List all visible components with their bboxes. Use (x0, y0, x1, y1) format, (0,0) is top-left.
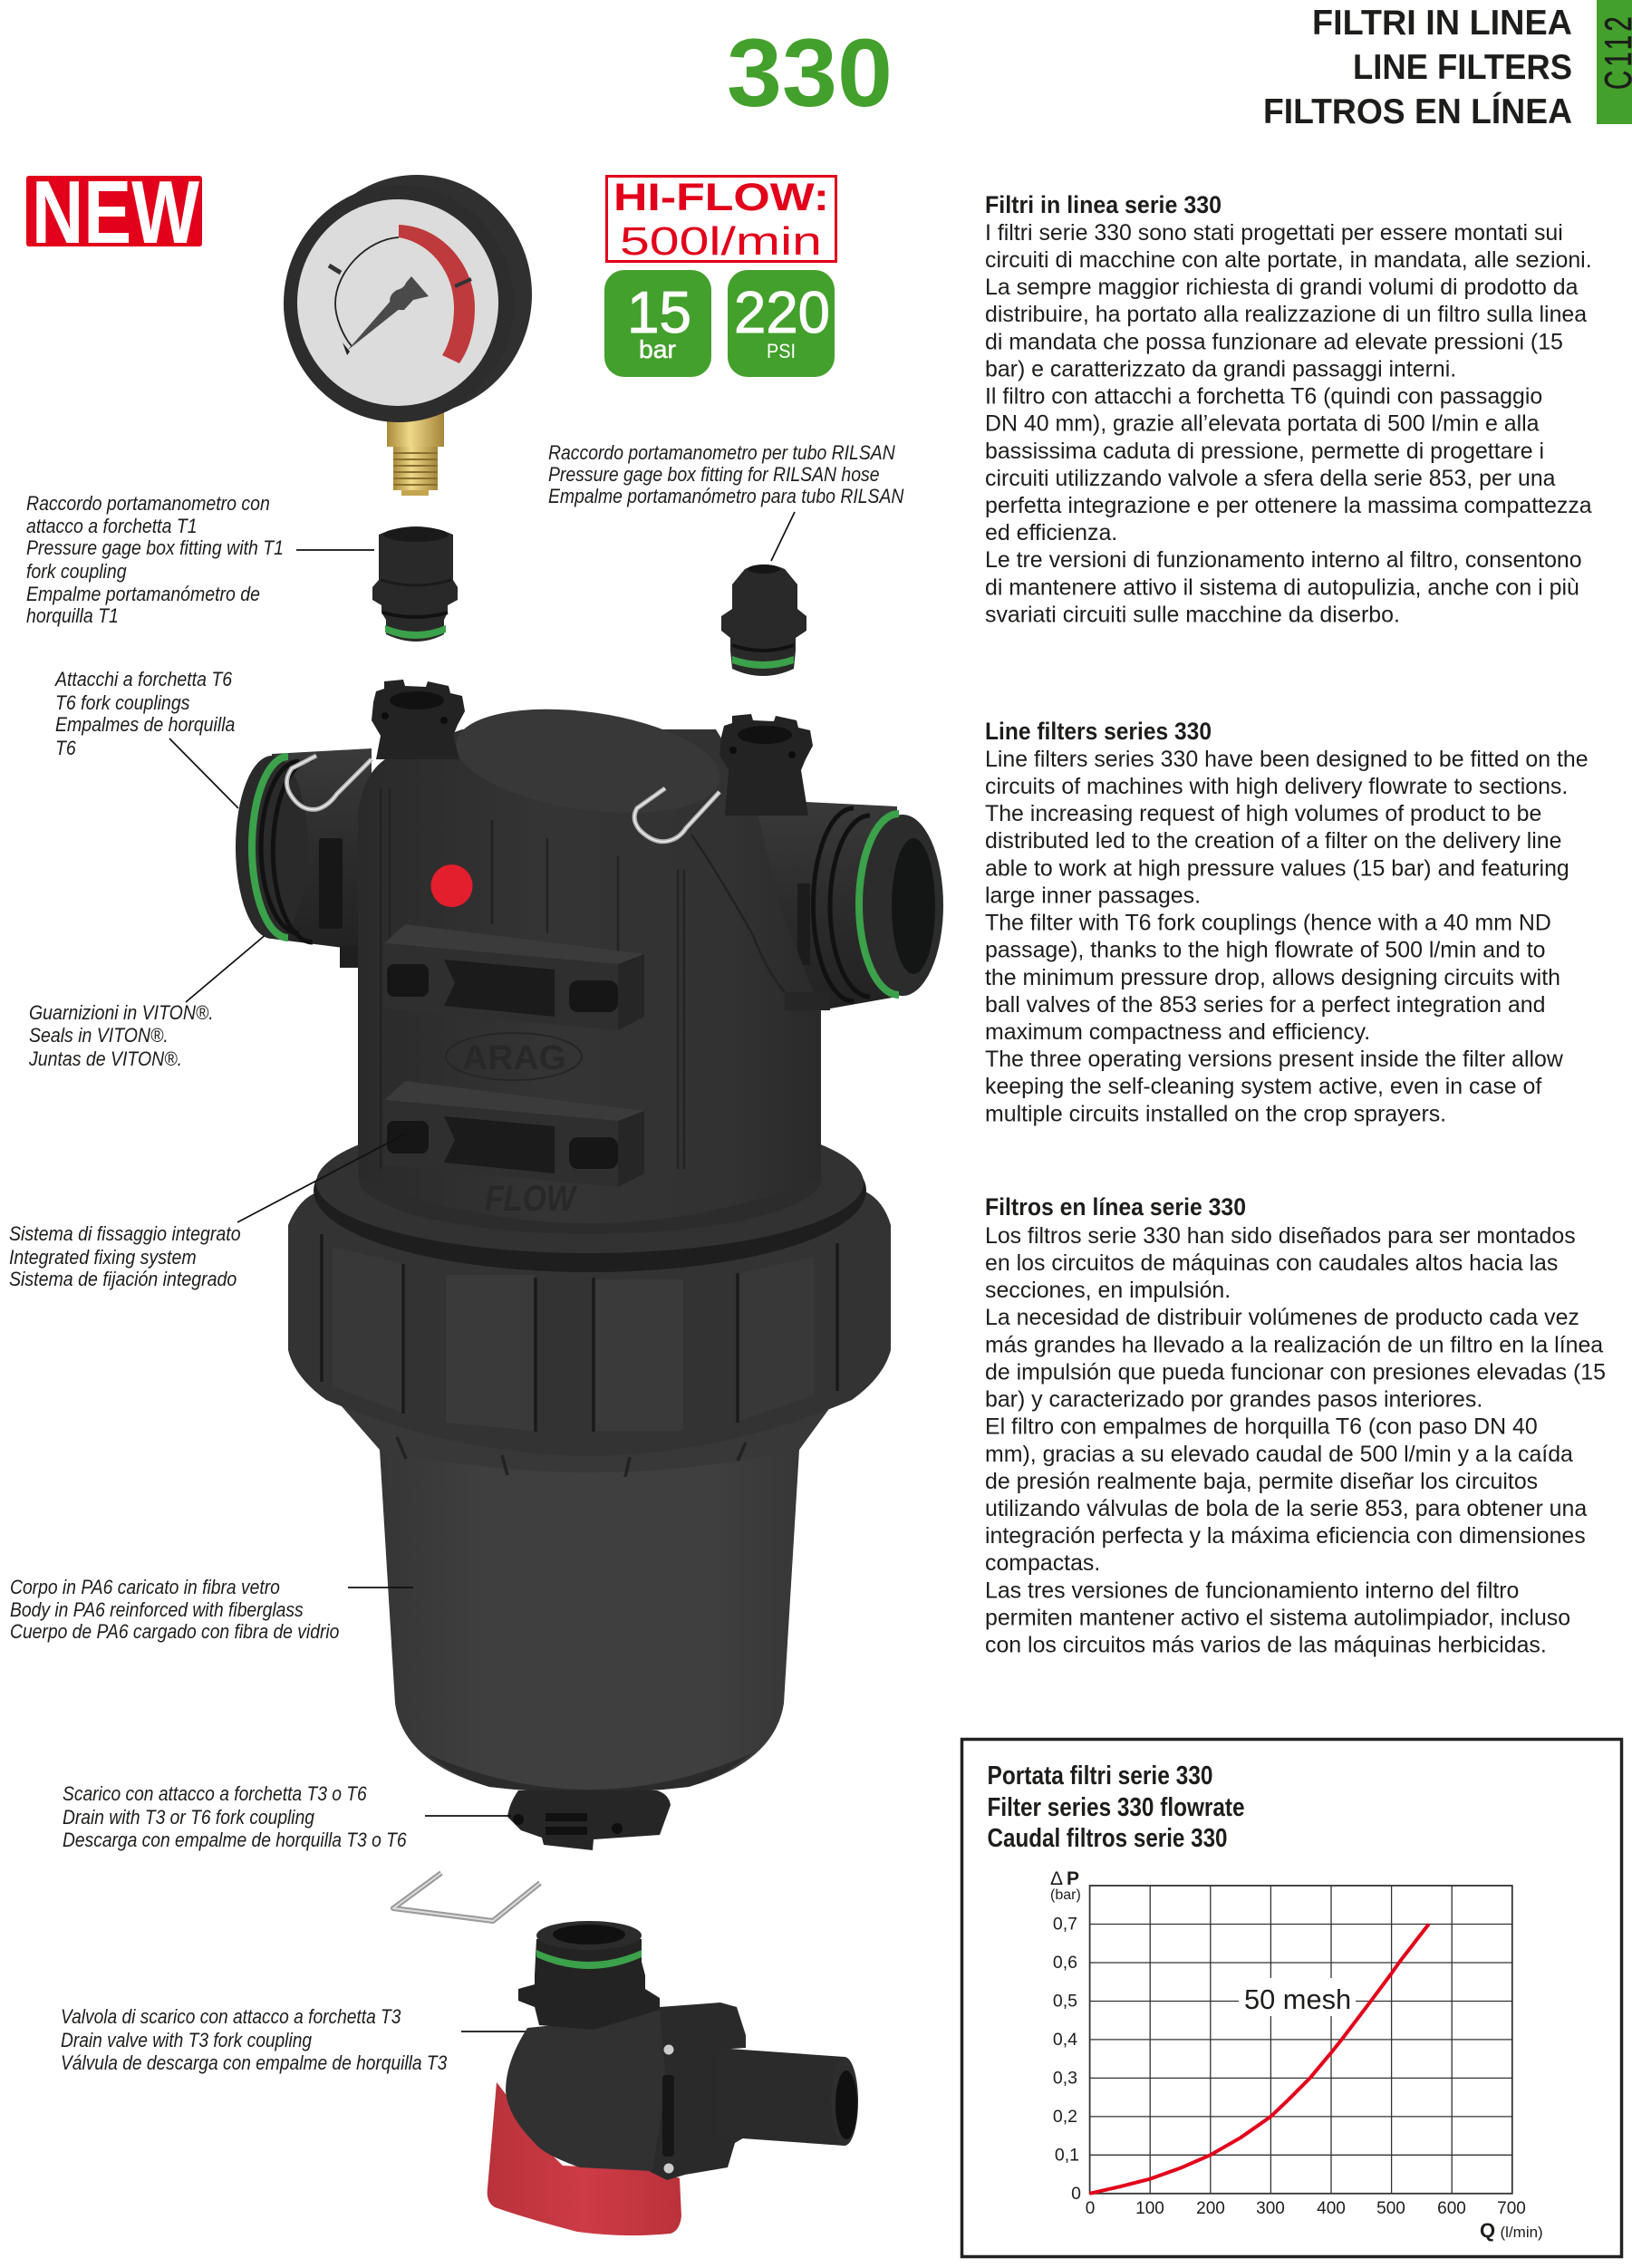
caption: RILSAN gauge fitting: Empalme portamanómetro para tubo RILSAN (548, 486, 903, 507)
text block: español: mm), gracias a su elevado caudal de 500 l/min y a la caída (985, 1442, 1573, 1467)
text block: español: El filtro con empalmes de horquilla T6 (con paso DN 40 (985, 1414, 1538, 1439)
text block: english: large inner passages. (985, 883, 1201, 908)
text block: italiano: distribuire, ha portato alla realizzazione di un filtro sulla linea (985, 302, 1587, 327)
page tab: C112 (1597, 0, 1632, 124)
x axis labels: 300 (1256, 2199, 1285, 2218)
text block: italiano: Il filtro con attacchi a forchetta T6 (quindi con passaggio (985, 384, 1542, 410)
text block: español: en los circuitos de máquinas con caudales altos hacia las (985, 1250, 1558, 1276)
text block: english: passage), thanks to the high flowrate of 500 l/min and to (985, 937, 1546, 962)
caption: RILSAN gauge fitting: Pressure gage box fitting for RILSAN hose (548, 464, 880, 486)
text block: italiano: perfetta integrazione e per ottenere la massima compattezza (985, 493, 1592, 518)
leader line: body (348, 1587, 413, 1588)
leader line: seals (186, 933, 267, 1002)
text block: italiano: di mandata che possa funzionare ad elevate pressioni (15 (985, 330, 1563, 355)
heading: product category: FILTROS EN LÍNEA (1263, 92, 1572, 131)
badge: hi-flow 500 l/min: HI-FLOW: (613, 176, 829, 219)
text block: english (985, 718, 1589, 1127)
text block: italiano: circuiti utilizzando valvole a sfera della serie 853, per una (985, 466, 1556, 491)
badge: 15 bar: bar (639, 335, 676, 363)
caption: drain: Drain with T3 or T6 fork coupling (63, 1807, 314, 1829)
caption: drain: Descarga con empalme de horquilla T3 o T6 (63, 1829, 407, 1851)
caption: RILSAN gauge fitting (548, 442, 903, 507)
text block: english: distributed led to the creation of a filter on the delivery line (985, 828, 1561, 854)
caption: RILSAN gauge fitting: Raccordo portamanometro per tubo RILSAN (548, 442, 895, 464)
x axis labels: 600 (1437, 2199, 1466, 2218)
caption: T6 fork couplings: T6 (55, 738, 76, 759)
y axis labels: 0,7 (1053, 1914, 1077, 1934)
y axis labels: 0,1 (1055, 2146, 1079, 2166)
y axis labels: 0,2 (1053, 2107, 1077, 2127)
curve label: 50 mesh: 50 mesh (1244, 1983, 1351, 2015)
text block: español: permiten mantener activo el sistema autolimpiador, incluso (985, 1606, 1570, 1631)
caption: VITON seals: Seals in VITON®. (29, 1025, 169, 1047)
text block: italiano: DN 40 mm), grazie all’elevata portata di 500 l/min e alla (985, 411, 1540, 437)
caption: integrated fixing system: Sistema de fijación integrado (9, 1269, 237, 1290)
badge: hi-flow 500 l/min: 500l/min (620, 219, 822, 264)
caption: drain valve: Drain valve with T3 fork coupling (61, 2030, 313, 2051)
left clip (286, 756, 372, 809)
text block: english: maximum compactness and efficiency. (985, 1019, 1370, 1045)
y axis labels: P (1067, 1868, 1079, 1889)
chart title: Caudal filtros serie 330 (988, 1824, 1227, 1853)
y axis labels: 0,4 (1053, 2030, 1077, 2050)
text block: español: utilizando válvulas de bola de la serie 853, para obtener una (985, 1496, 1587, 1521)
y axis labels: 0,3 (1053, 2068, 1077, 2088)
text block: italiano: circuiti di macchine con alte portate, in mandata, alle sezioni. (985, 247, 1592, 273)
badge: hi-flow 500 l/min (607, 176, 835, 264)
caption: VITON seals: Guarnizioni in VITON®. (29, 1002, 214, 1024)
y axis labels: Δ (1050, 1868, 1063, 1889)
x axis labels: 200 (1196, 2199, 1225, 2218)
y axis labels: 0,6 (1053, 1953, 1077, 1973)
text block: español: con los circuitos más varios de las máquinas herbicidas. (985, 1633, 1547, 1658)
text block: español: Filtros en línea serie 330 (985, 1193, 1246, 1221)
text block: español: bar) y caracterizado por grandes pasos interiores. (985, 1386, 1482, 1412)
side nut (649, 2003, 746, 2180)
y axis labels: 0,5 (1053, 1992, 1077, 2012)
top opening (536, 1921, 642, 1950)
text block: español: de impulsión que pueda funcionar con presiones elevadas (15 (985, 1359, 1606, 1385)
leader line: T6 couplings (169, 738, 238, 808)
icon: pressure gauge (284, 175, 532, 496)
logo: ARAG (462, 1039, 566, 1077)
text block: english: The three operating versions present inside the filter allow (985, 1047, 1564, 1072)
badge: NEW: NEW (32, 162, 199, 262)
text block: español: integración perfecta y la máxima eficiencia con dimensiones (985, 1523, 1586, 1549)
heading: product category: LINE FILTERS (1353, 48, 1572, 87)
chart title: Filter series 330 flowrate (988, 1793, 1245, 1822)
caption: T1 gauge fitting: fork coupling (26, 561, 127, 583)
bolt bar (662, 2044, 674, 2173)
red handle (488, 2082, 681, 2235)
x axis labels: 500 (1376, 2199, 1405, 2218)
red button (431, 864, 473, 907)
x axis labels (1086, 2199, 1543, 2242)
caption: VITON seals (28, 1002, 214, 1070)
x axis labels: 700 (1497, 2199, 1526, 2218)
caption: integrated fixing system: Sistema di fissaggio integrato (9, 1223, 241, 1245)
red flow curve (1090, 1925, 1429, 2194)
leader line: RILSAN fitting (771, 512, 795, 561)
text block: italiano: I filtri serie 330 sono stati progettati per essere montati sui (985, 220, 1563, 246)
text block: italiano: bassissima caduta di pressione, permette di progettare i (985, 439, 1544, 464)
text block: italiano: Le tre versioni di funzionamento interno al filtro, consentono (985, 547, 1582, 573)
text block: español: de presión realmente baja, permite diseñar los circuitos (985, 1469, 1538, 1494)
caption: T1 gauge fitting: horquilla T1 (26, 605, 119, 627)
caption: drain valve: Valvola di scarico con attacco a forchetta T3 (61, 2006, 401, 2028)
valve body (506, 2007, 666, 2171)
badge: 220 PSI: PSI (767, 340, 796, 362)
text block: english: Line filters series 330 (985, 718, 1212, 745)
y axis labels (1050, 1868, 1081, 2204)
text block: english: able to work at high pressure values (15 bar) and featuring (985, 855, 1569, 881)
caption: T6 fork couplings: Attacchi a forchetta T6 (53, 669, 233, 690)
badge: 15 bar (604, 270, 711, 377)
text block: español: secciones, en impulsión. (985, 1278, 1231, 1303)
left fork coupling (372, 680, 465, 759)
text block: español (985, 1193, 1606, 1658)
heading: product category (1263, 4, 1572, 131)
text block: italiano: La sempre maggior richiesta di grandi volumi di prodotto da (985, 275, 1579, 300)
wings and neck (518, 1939, 660, 2030)
ring nut (288, 1192, 891, 1456)
part: drain valve (488, 1921, 858, 2235)
text block: english: ball valves of the 853 series for a perfect integration and (985, 992, 1546, 1018)
upper bracket (384, 924, 644, 1030)
caption: T1 gauge fitting: attacco a forchetta T1 (26, 516, 198, 537)
part: RILSAN gauge fitting (721, 565, 806, 676)
x axis labels: 0 (1086, 2199, 1095, 2218)
heading: product category: FILTRI IN LINEA (1312, 4, 1572, 43)
text block: italiano: ed efficienza. (985, 520, 1117, 545)
text block: english: The increasing request of high volumes of product to be (985, 801, 1541, 826)
x axis labels: 100 (1135, 2199, 1164, 2218)
caption: VITON seals: Juntas de VITON®. (28, 1048, 182, 1070)
part: T1 gauge fitting (372, 526, 458, 642)
panel: flowrate chart (962, 1740, 1622, 2256)
caption: body material (10, 1577, 339, 1643)
caption: drain valve: Válvula de descarga con empalme de horquilla T3 (61, 2052, 448, 2074)
caption: T1 gauge fitting: Pressure gage box fitting with T1 (26, 537, 284, 559)
caption: T1 gauge fitting (26, 493, 284, 627)
badge: 220 PSI: 220 (734, 279, 830, 345)
y axis labels: 0 (1071, 2184, 1081, 2204)
product: line filter 330 (236, 680, 943, 1850)
text block: english: keeping the self-cleaning system active, even in case of (985, 1074, 1541, 1099)
caption: drain (63, 1783, 407, 1851)
hose barb (717, 2048, 845, 2146)
text block: italiano: svariati circuiti sulle macchine da diserbo. (985, 602, 1400, 627)
leader line: drain (425, 1815, 511, 1817)
y axis labels: (bar) (1050, 1887, 1081, 1903)
bowl (380, 1450, 799, 1792)
caption: body material: Corpo in PA6 caricato in fibra vetro (10, 1577, 280, 1598)
text block: italiano: di mantenere attivo il sistema di autopulizia, anche con i più (985, 574, 1579, 600)
main housing (358, 729, 821, 1223)
text block: italiano: bar) e caratterizzato da grandi passaggi interni. (985, 357, 1456, 382)
caption: T1 gauge fitting: Raccordo portamanometro con (26, 493, 270, 515)
right port (716, 797, 943, 1010)
housing ribs (381, 788, 785, 1169)
text block: español: La necesidad de distribuir volúmenes de producto cada vez (985, 1305, 1579, 1330)
lower bracket (384, 1081, 644, 1187)
x axis labels: Q (1480, 2219, 1495, 2242)
text block: español: compactas. (985, 1550, 1100, 1576)
caption: body material: Body in PA6 reinforced with fiberglass (10, 1599, 304, 1621)
caption: drain: Scarico con attacco a forchetta T3 o T6 (63, 1783, 367, 1805)
left port (236, 748, 372, 968)
chart title: Portata filtri serie 330 (988, 1761, 1212, 1790)
x axis labels: 400 (1317, 2199, 1346, 2218)
text block: english: The filter with T6 fork couplings (hence with a 40 mm ND (985, 910, 1551, 935)
leader line: valve (461, 2031, 527, 2032)
caption: integrated fixing system: Integrated fixing system (9, 1247, 197, 1269)
chart title (988, 1761, 1245, 1853)
flange (314, 1109, 866, 1272)
green ring (536, 1950, 642, 1969)
text block: español: más grandes ha llevado a la realización de un filtro en la línea (985, 1332, 1603, 1357)
text block: english: multiple circuits installed on the crop sprayers. (985, 1102, 1446, 1127)
flow mark: FLOW (485, 1179, 578, 1219)
right clip (634, 788, 719, 842)
right fork coupling (719, 714, 813, 816)
caption: integrated fixing system (9, 1223, 241, 1290)
caption: T6 fork couplings (53, 669, 235, 759)
leader line: T1 fitting (296, 549, 374, 551)
caption: drain valve (61, 2006, 448, 2074)
text block: english: the minimum pressure drop, allows designing circuits with (985, 965, 1560, 990)
text block: english: circuits of machines with high delivery flowrate to sections. (985, 774, 1568, 799)
text block: español: Los filtros serie 330 han sido diseñados para ser montados (985, 1223, 1576, 1249)
drain fork coupling (507, 1790, 671, 1850)
lower skirt (342, 1406, 831, 1472)
logo (446, 1033, 582, 1080)
dome (449, 694, 727, 828)
leader line: fixing system (237, 1134, 404, 1222)
x axis labels: (l/min) (1501, 2224, 1543, 2241)
text block: español: Las tres versiones de funcionamiento interno del filtro (985, 1578, 1519, 1604)
part: fork clip (393, 1873, 540, 1921)
caption: T6 fork couplings: Empalmes de horquilla (55, 714, 235, 736)
badge: 220 PSI (728, 270, 835, 377)
grid (1090, 1886, 1512, 2194)
caption: body material: Cuerpo de PA6 cargado con fibra de vidrio (10, 1621, 339, 1643)
badge: 15 bar: 15 (627, 279, 691, 345)
title: 330: 330 (727, 18, 893, 127)
text block: english: Line filters series 330 have been designed to be fitted on the (985, 747, 1589, 772)
text block: italiano: Filtri in linea serie 330 (985, 191, 1222, 218)
text block: italiano (985, 191, 1592, 627)
caption: T1 gauge fitting: Empalme portamanómetro de (26, 584, 260, 605)
caption: T6 fork couplings: T6 fork couplings (55, 692, 190, 714)
